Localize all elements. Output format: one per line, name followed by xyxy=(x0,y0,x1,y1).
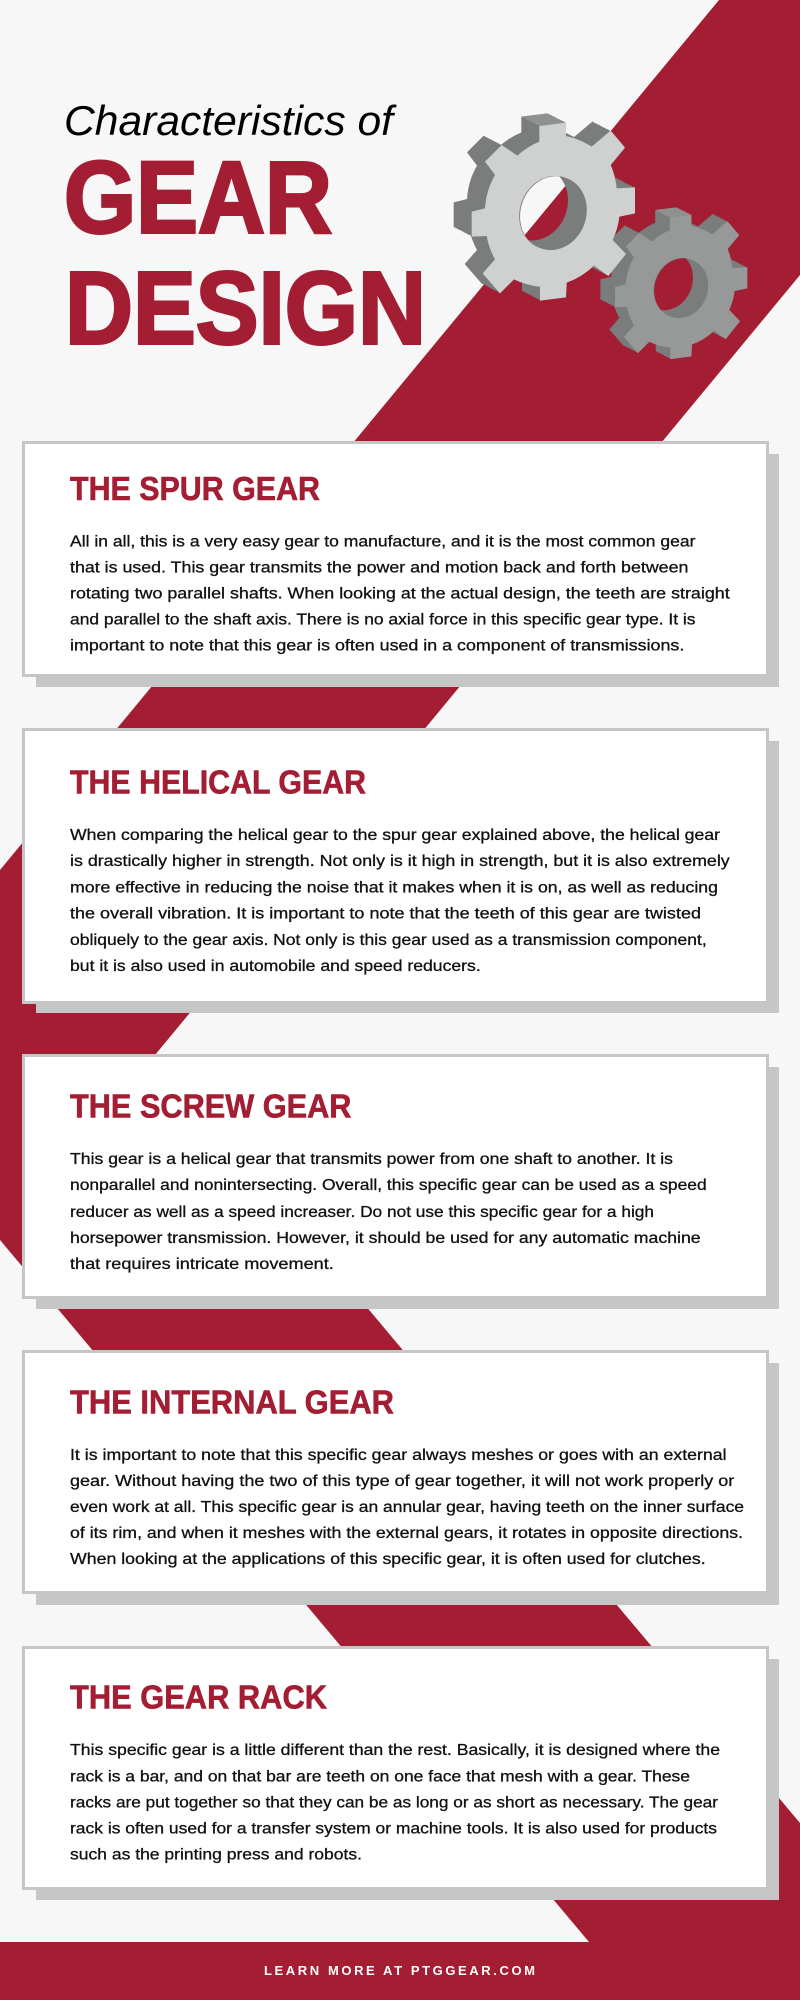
text: helical gear description: obliquely to the gear axis. Not only is this gear used as a transmission component, xyxy=(70,932,707,949)
title: characteristics of: Characteristics of xyxy=(64,97,397,144)
text: internal gear description: of its rim, and when it meshes with the external gears, it rotates in opposite directions. xyxy=(70,1525,743,1542)
text: gear rack description: racks are put together so that they can be as long or as short as necessary. The gear xyxy=(70,1794,719,1812)
footer bar xyxy=(0,1942,800,2000)
text: screw gear description: This gear is a helical gear that transmits power from one shaft to another. It is xyxy=(70,1151,673,1168)
heading: the spur gear: THE SPUR GEAR xyxy=(70,471,320,508)
text: internal gear description xyxy=(70,1447,744,1568)
text: gear rack description: rack is a bar, and on that bar are teeth on one face that mesh with a gear. These xyxy=(70,1768,690,1786)
text: helical gear description xyxy=(70,827,730,975)
text: spur gear description: rotating two parallel shafts. When looking at the actual design, the teeth are straight xyxy=(70,586,730,602)
icon: small dark gear xyxy=(600,207,747,359)
text: internal gear description: When looking at the applications of this specific gear, it is often used for clutches. xyxy=(70,1551,706,1568)
panel: the spur gear xyxy=(24,442,779,687)
footer text: LEARN MORE AT PTGGEAR.COM xyxy=(264,1963,535,1978)
icon: large light gear xyxy=(454,113,635,301)
text: helical gear description: but it is also used in automobile and speed reducers. xyxy=(70,958,481,975)
text: gear rack description: rack is often used for a transfer system or machine tools. It is also used for products xyxy=(70,1820,717,1838)
text: helical gear description: the overall vibration. It is important to note that the teeth of this gear are twisted xyxy=(70,906,701,922)
heading: the internal gear: THE INTERNAL GEAR xyxy=(70,1384,394,1422)
text: gear rack description: This specific gear is a little different than the rest. Basically, it is designed where the xyxy=(70,1742,720,1759)
title: design: DESIGN xyxy=(65,250,426,366)
panel: the screw gear xyxy=(24,1056,779,1309)
text: spur gear description: important to note that this gear is often used in a component of transmissions. xyxy=(70,638,684,654)
text: spur gear description: and parallel to the shaft axis. There is no axial force in this specific gear type. It is xyxy=(70,612,696,628)
heading: the helical gear: THE HELICAL GEAR xyxy=(70,764,366,802)
text: gear rack description: such as the printing press and robots. xyxy=(70,1846,362,1864)
text: helical gear description: When comparing the helical gear to the spur gear explained above, the helical gear xyxy=(70,827,721,844)
title: gear: GEAR xyxy=(64,140,332,254)
text: screw gear description: that requires intricate movement. xyxy=(70,1256,334,1273)
text: internal gear description: It is important to note that this specific gear always meshes or goes with an external xyxy=(70,1447,727,1464)
text: helical gear description: is drastically higher in strength. Not only is it high in strength, but it is also extremely xyxy=(70,853,730,870)
text: spur gear description xyxy=(70,534,730,654)
text: screw gear description: nonparallel and nonintersecting. Overall, this specific gear can be used as a speed xyxy=(70,1177,707,1194)
text: screw gear description xyxy=(70,1151,707,1273)
panel: the internal gear xyxy=(24,1352,779,1605)
text: internal gear description: gear. Without having the two of this type of gear together, it will not work properly or xyxy=(70,1473,735,1490)
text: spur gear description: All in all, this is a very easy gear to manufacture, and it is the most common gear xyxy=(70,534,696,550)
heading: the gear rack: THE GEAR RACK xyxy=(70,1680,327,1716)
icon: two gears xyxy=(454,113,747,359)
text: gear rack description xyxy=(70,1742,720,1864)
text: spur gear description: that is used. This gear transmits the power and motion back and forth between xyxy=(70,560,688,576)
heading: the screw gear: THE SCREW GEAR xyxy=(70,1088,352,1126)
text: screw gear description: reducer as well as a speed increaser. Do not use this specific gear for a high xyxy=(70,1204,654,1221)
title block xyxy=(64,97,426,366)
text: internal gear description: even work at all. This specific gear is an annular gear, having teeth on the inner surface xyxy=(70,1499,744,1516)
text: screw gear description: horsepower transmission. However, it should be used for any automatic machine xyxy=(70,1230,701,1247)
text: helical gear description: more effective in reducing the noise that it makes when it is on, as well as reducing xyxy=(70,880,718,896)
panel: the helical gear xyxy=(24,730,779,1013)
panel: the gear rack xyxy=(24,1648,779,1900)
